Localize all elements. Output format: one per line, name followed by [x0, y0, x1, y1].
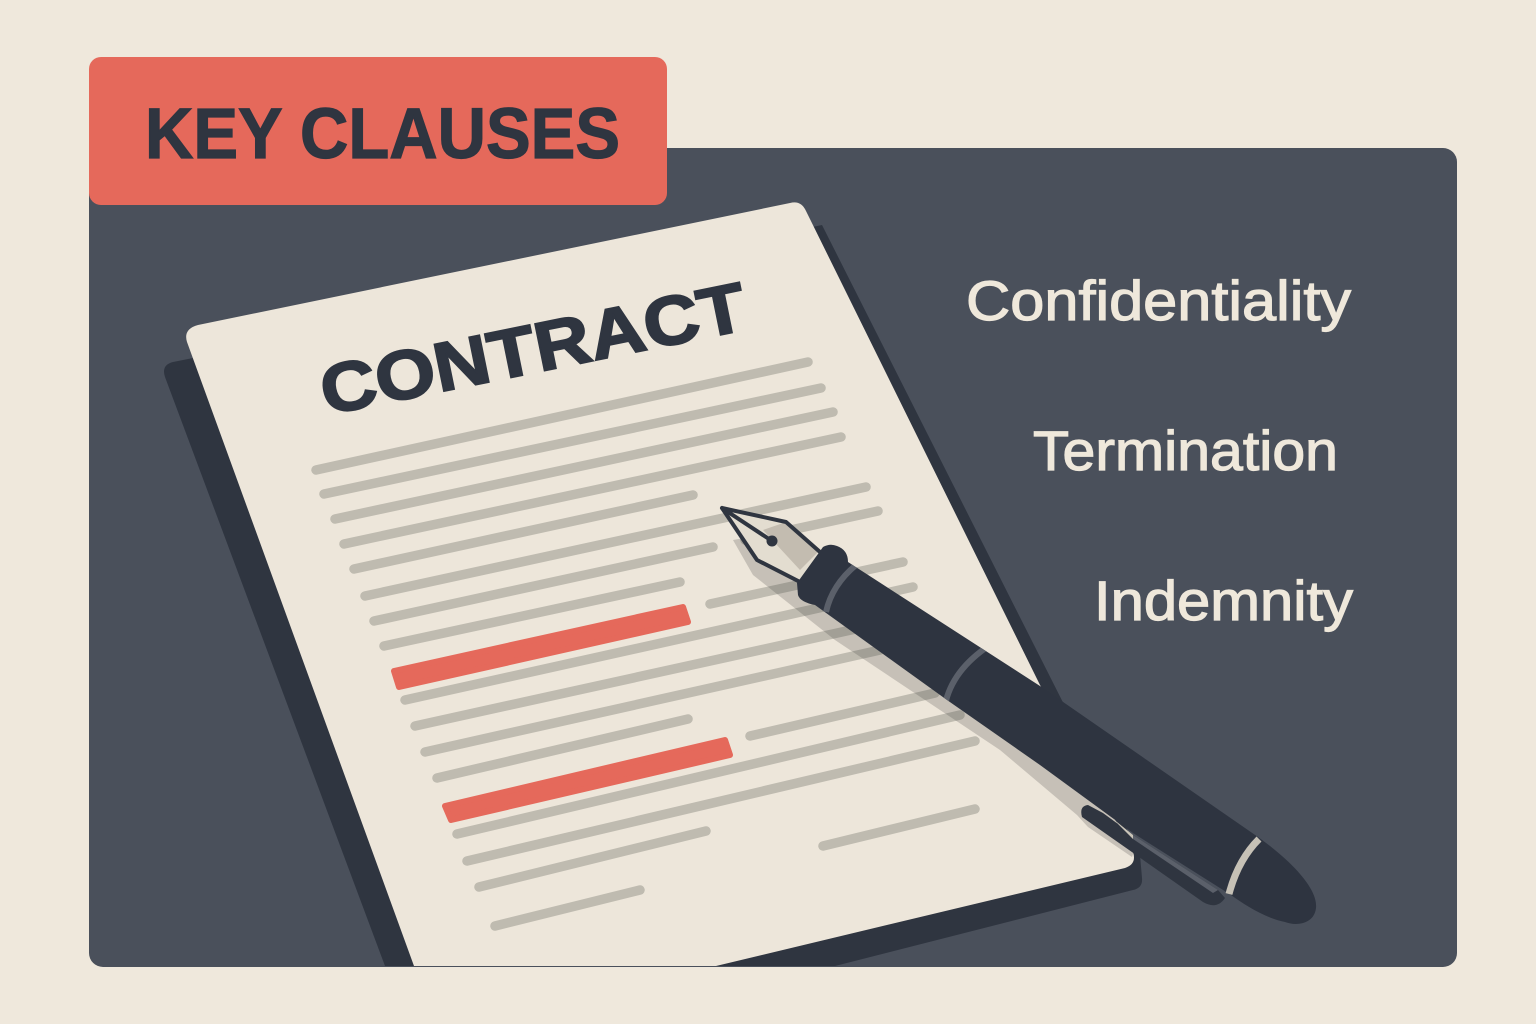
label: Termination: Termination	[1033, 419, 1338, 482]
highlighted clause 2	[445, 740, 730, 820]
panel: dark background	[89, 148, 1457, 967]
cap ring	[1229, 839, 1259, 894]
document heading: CONTRACT	[314, 268, 752, 430]
label: Indemnity: Indemnity	[1094, 569, 1353, 632]
clause labels	[966, 269, 1353, 632]
title tag	[89, 57, 667, 205]
pen clip	[1081, 805, 1225, 905]
pen body	[797, 545, 1316, 924]
text lines	[316, 362, 975, 926]
icon: fountain pen	[722, 508, 1316, 924]
title: KEY CLAUSES	[145, 95, 620, 174]
panel: contract document	[186, 202, 1134, 966]
pen shadow	[733, 530, 1140, 857]
pen nib	[722, 508, 820, 583]
clip highlight	[1133, 835, 1218, 893]
highlighted clause 1	[394, 607, 688, 687]
paper shadow	[164, 225, 1142, 966]
gray barrel rings	[826, 565, 990, 705]
label: Confidentiality: Confidentiality	[966, 269, 1351, 332]
